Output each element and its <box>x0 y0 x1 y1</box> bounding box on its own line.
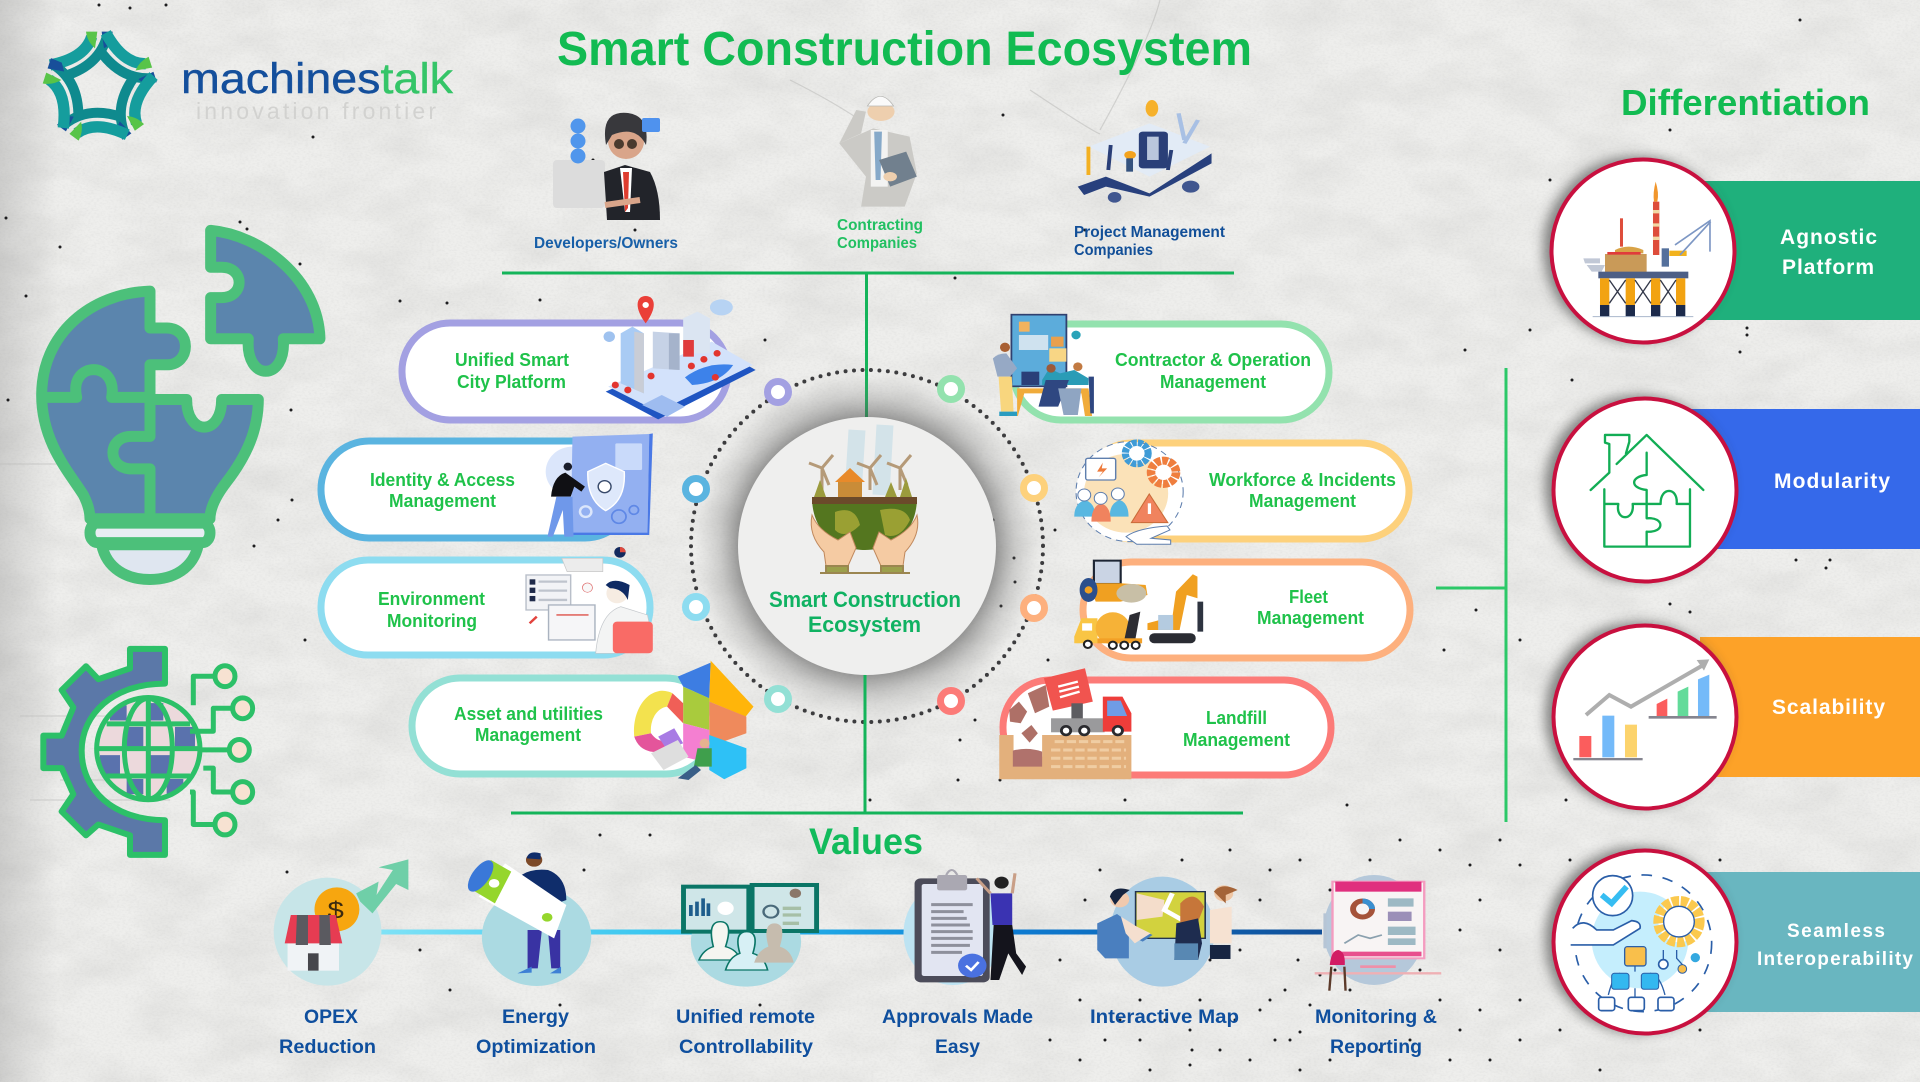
label: Monitoring & <box>1315 1007 1437 1028</box>
stakeholder: Contracting Companies <box>837 96 923 252</box>
pill text line 2: City Platform <box>457 372 566 392</box>
pill text line 2: Management <box>1257 608 1364 628</box>
hub label line 2: Ecosystem <box>808 612 921 637</box>
icon: landfill truck <box>999 668 1131 779</box>
title: Smart Construction Ecosystem <box>557 23 1252 76</box>
icon: growth chart <box>1573 659 1717 760</box>
label: Approvals Made <box>882 1007 1033 1028</box>
pill text: Environment <box>378 589 485 609</box>
hub label: Smart Construction <box>769 587 961 612</box>
icon: interoperability <box>1571 875 1712 1012</box>
ring nodes <box>686 378 1044 712</box>
label: OPEX <box>304 1007 358 1028</box>
icon: store and savings <box>274 859 408 986</box>
icon: environment operator <box>526 547 653 653</box>
card: Agnostic Platform <box>1543 156 1920 342</box>
label: Unified remote <box>676 1007 815 1028</box>
label: Contracting <box>837 217 923 234</box>
label line 2: Companies <box>1074 242 1153 259</box>
connector: differentiation bracket <box>1436 368 1506 822</box>
pill text: Identity & Access <box>370 470 515 490</box>
value: OPEX Reduction <box>274 859 408 1058</box>
value: Energy Optimization <box>463 852 596 1058</box>
label line 2: Controllability <box>679 1037 813 1058</box>
icon: team at map screen <box>1097 877 1238 987</box>
card: Scalability <box>1545 622 1920 808</box>
panel: Asset and utilities Management <box>412 661 754 780</box>
label line 2: Companies <box>837 235 917 252</box>
logo wordmark: machines talk <box>181 55 454 103</box>
icon: analytics dashboard <box>1315 875 1441 991</box>
icon: workforce incidents <box>1074 442 1183 544</box>
pill text line 2: Management <box>1183 730 1290 750</box>
stakeholder: Project Management Companies <box>1074 100 1226 259</box>
pill text line 2: Management <box>1160 372 1266 392</box>
label: Energy <box>502 1007 569 1028</box>
card label: Scalability <box>1772 696 1885 719</box>
icon: team at project board <box>993 315 1094 416</box>
pill text line 2: Management <box>1249 491 1356 511</box>
pill text line 2: Management <box>475 725 581 745</box>
stakeholder: Developers/Owners <box>534 113 678 252</box>
value: Unified remote Controllability <box>676 885 817 1058</box>
panel: Fleet Management <box>1074 561 1410 658</box>
icon: oil platform <box>1583 182 1711 317</box>
pill text: Workforce & Incidents <box>1209 470 1396 490</box>
panel: Identity & Access Management <box>321 433 653 538</box>
heading: Values: Values <box>809 821 923 862</box>
icon: smart city tablet <box>604 296 756 419</box>
icon: earth in hands <box>809 425 918 573</box>
icon: construction vehicles <box>1074 561 1203 649</box>
card label line 2: Interoperability <box>1757 949 1913 970</box>
connector: lower hub line <box>511 675 1243 813</box>
icon: store and savings: $ <box>328 897 344 924</box>
card label: Modularity <box>1774 470 1890 493</box>
value: Interactive Map <box>1090 877 1239 1028</box>
label: Developers/Owners <box>534 235 678 252</box>
icon: developer with laptop <box>553 113 660 220</box>
icon: puzzle lightbulb <box>42 230 320 579</box>
value: Approvals Made Easy <box>882 870 1033 1058</box>
panel: Landfill Management <box>999 668 1331 779</box>
icon: remote control screens <box>684 885 817 987</box>
stakeholder divider line <box>502 273 1234 432</box>
pill text: Asset and utilities <box>454 704 603 724</box>
label line 2: Easy <box>935 1037 980 1058</box>
icon: project workflow platform <box>1078 100 1212 203</box>
hub shadow <box>695 374 1039 718</box>
panel: Workforce & Incidents Management <box>1074 442 1409 544</box>
value: Monitoring & Reporting <box>1315 875 1441 1058</box>
pill text: Contractor & Operation <box>1115 350 1311 370</box>
logo tagline: innovation frontier <box>196 98 436 124</box>
logo <box>32 23 454 162</box>
pill text: Fleet <box>1289 587 1328 607</box>
panel: Unified Smart City Platform <box>402 296 756 420</box>
label: Interactive Map <box>1090 1007 1239 1028</box>
pill text: Unified Smart <box>455 350 569 370</box>
label: Project Management <box>1074 224 1226 241</box>
card: Modularity <box>1545 395 1920 582</box>
dotted orbit <box>691 370 1043 722</box>
icon: clipboard and person <box>903 870 1026 985</box>
card label: Seamless <box>1787 921 1885 942</box>
logo star mark <box>32 23 173 162</box>
card label: Agnostic <box>1780 226 1877 249</box>
icon: gear and globe network <box>43 649 253 855</box>
icon: access security <box>546 433 653 537</box>
panel: central hub <box>738 417 996 675</box>
heading: Differentiation: Differentiation <box>1621 82 1870 123</box>
pill text: Landfill <box>1206 708 1267 728</box>
pill text line 2: Management <box>389 491 496 511</box>
panel: Contractor & Operation Management <box>993 315 1329 420</box>
pill text line 2: Monitoring <box>387 611 477 631</box>
label line 2: Reduction <box>279 1037 376 1058</box>
card label line 2: Platform <box>1782 256 1874 279</box>
icon: engineer in helmet <box>839 96 917 207</box>
icon: puzzle house <box>1591 435 1703 547</box>
card: Seamless Interoperability <box>1545 847 1920 1034</box>
icon: utility blocks <box>634 661 754 780</box>
label line 2: Reporting <box>1330 1037 1422 1058</box>
panel: Environment Monitoring <box>321 547 653 655</box>
icon: person carrying battery <box>463 852 591 986</box>
values timeline line <box>381 930 1322 934</box>
label line 2: Optimization <box>476 1037 596 1058</box>
